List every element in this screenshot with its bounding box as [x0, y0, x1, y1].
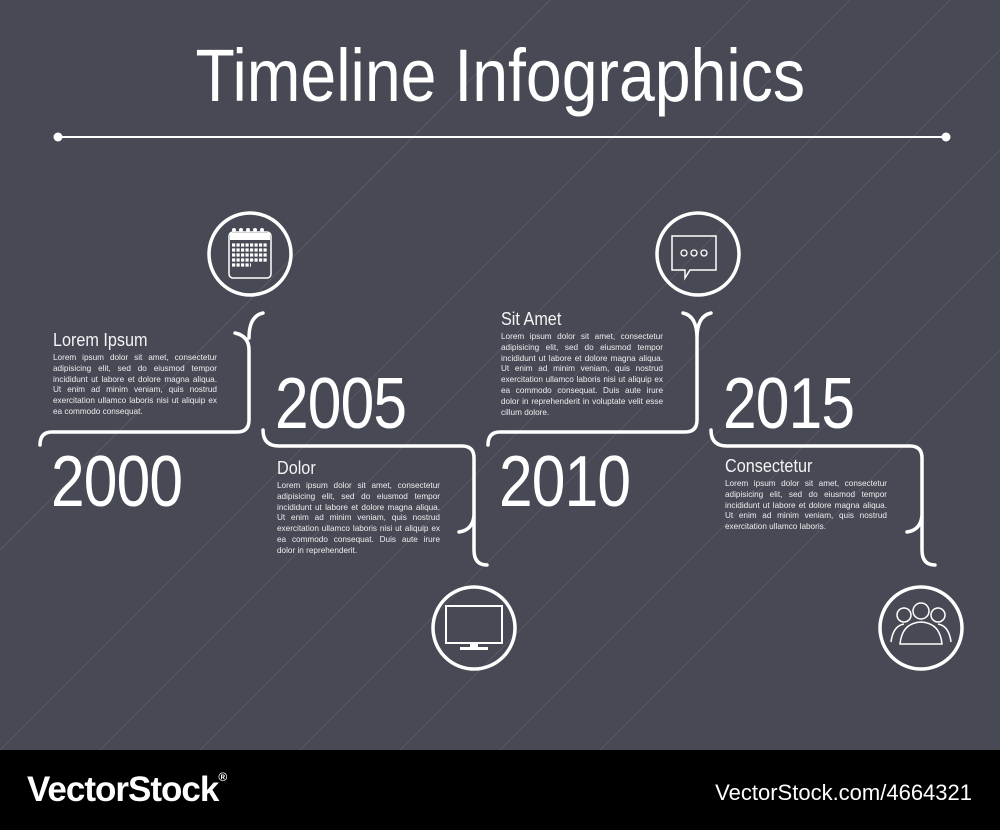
block 2000 text: Lorem ipsum dolor sit amet, consectetur adipisicing elit, sed do eiusmod tempor incididunt ut labore et dolore magna aliqua. Ut enim ad minim veniam, quis nostrud exercitation ullamco laboris nisi ut aliquip ex ea commodo consequat.	[53, 353, 217, 416]
block 2015 text: Consectetur	[725, 456, 812, 476]
block 2015 text: Lorem ipsum dolor sit amet, consectetur adipisicing elit, sed do eiusmod tempor incididunt ut labore et dolore magna aliqua. Ut enim ad minim veniam, quis nostrud exercitation ullamco laboris.	[725, 479, 887, 531]
block 2015 text	[725, 456, 887, 531]
timeline connectors	[40, 313, 935, 565]
footer bar	[0, 750, 1000, 830]
icon: chat	[655, 211, 741, 297]
icon: calendar	[207, 211, 293, 297]
footer url: VectorStock.com/4664321	[715, 780, 972, 805]
title underline	[54, 132, 950, 142]
year 2005: 2005	[275, 364, 406, 444]
footer logo: VectorStock®	[27, 770, 226, 809]
block 2005 text: Lorem ipsum dolor sit amet, consectetur adipisicing elit, sed do eiusmod tempor incididunt ut labore et dolore magna aliqua. Ut enim ad minim veniam, quis nostrud exercitation ullamco laboris nisi ut aliquip ex ea commodo consequat. Duis aute irure dolor in reprehenderit.	[277, 481, 440, 555]
year 2010: 2010	[499, 442, 630, 522]
block 2010 text: Lorem ipsum dolor sit amet, consectetur adipisicing elit, sed do eiusmod tempor incididunt ut labore et dolore magna aliqua. Ut enim ad minim veniam, quis nostrud exercitation ullamco laboris nisi ut aliquip ex ea commodo consequat. Duis aute irure dolor in reprehenderit in voluptate velit esse cillum dolore.	[501, 332, 663, 417]
block 2000 text: Lorem Ipsum	[53, 330, 148, 350]
title: Timeline Infographics	[195, 34, 805, 117]
year 2000: 2000	[51, 442, 182, 522]
block 2005 text: Dolor	[277, 458, 316, 478]
icon: monitor	[431, 585, 517, 671]
year 2015: 2015	[723, 364, 854, 444]
icon: people	[878, 585, 964, 671]
block 2010 text: Sit Amet	[501, 309, 561, 329]
